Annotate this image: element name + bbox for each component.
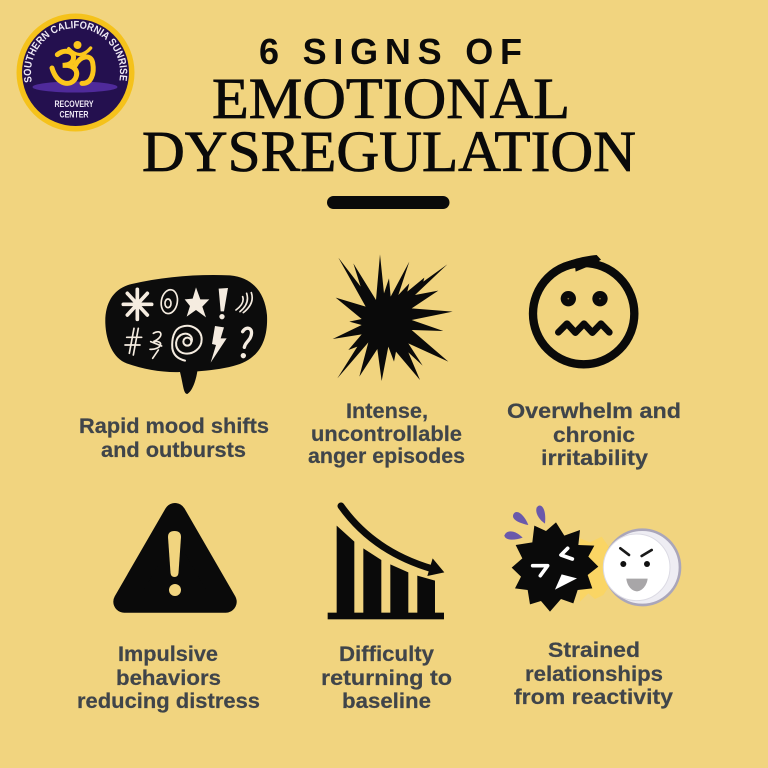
label: impulsive behaviors: Impulsive [118,643,218,666]
label: overwhelm and irritability: irritability [541,447,648,470]
label: anger episodes: Intense, [346,400,428,423]
label: impulsive behaviors: reducing distress [77,690,260,713]
icon: anxious face [533,255,634,364]
label: difficulty returning to baseline: Difficulty [339,643,434,666]
icon: speech bubble with symbols [105,275,267,394]
label: anger episodes: uncontrollable [311,423,462,446]
logo: Southern California Sunrise Recovery Center: SOUTHERN CALIFORNIA SUNRISE [24,20,128,82]
label: strained relationships: relationships [525,663,663,686]
label: overwhelm and irritability: Overwhelm and [507,400,681,423]
icon: declining bar chart with arrow [328,506,444,619]
title: DYSREGULATION [142,119,636,184]
label: strained relationships: Strained [548,639,640,662]
icon: warning triangle [124,514,226,602]
title [142,31,636,184]
title divider bar [327,196,450,209]
title: EMOTIONAL [212,66,570,131]
label: rapid mood shifts [79,415,269,462]
label: difficulty returning to baseline: returning to [321,667,452,690]
label: anger episodes [308,400,465,468]
label: overwhelm and irritability [507,400,681,470]
label: rapid mood shifts: Rapid mood shifts [79,415,269,438]
label: difficulty returning to baseline: baseline [342,690,431,713]
label: overwhelm and irritability: chronic [553,424,635,447]
icon: clashing faces [504,506,680,612]
label: anger episodes: anger episodes [308,445,465,468]
logo: Southern California Sunrise Recovery Center [16,14,134,132]
label: strained relationships [514,639,673,709]
label: impulsive behaviors: behaviors [116,667,221,690]
title: 6 SIGNS OF [259,31,522,72]
label: impulsive behaviors [77,643,260,713]
label: rapid mood shifts: and outbursts [101,439,246,462]
icon: explosion burst [333,254,453,381]
label: difficulty returning to baseline [321,643,452,713]
label: strained relationships: from reactivity [514,686,673,709]
logo: Southern California Sunrise Recovery Center: CENTER [60,110,89,120]
logo: Southern California Sunrise Recovery Center: RECOVERY [54,99,94,110]
